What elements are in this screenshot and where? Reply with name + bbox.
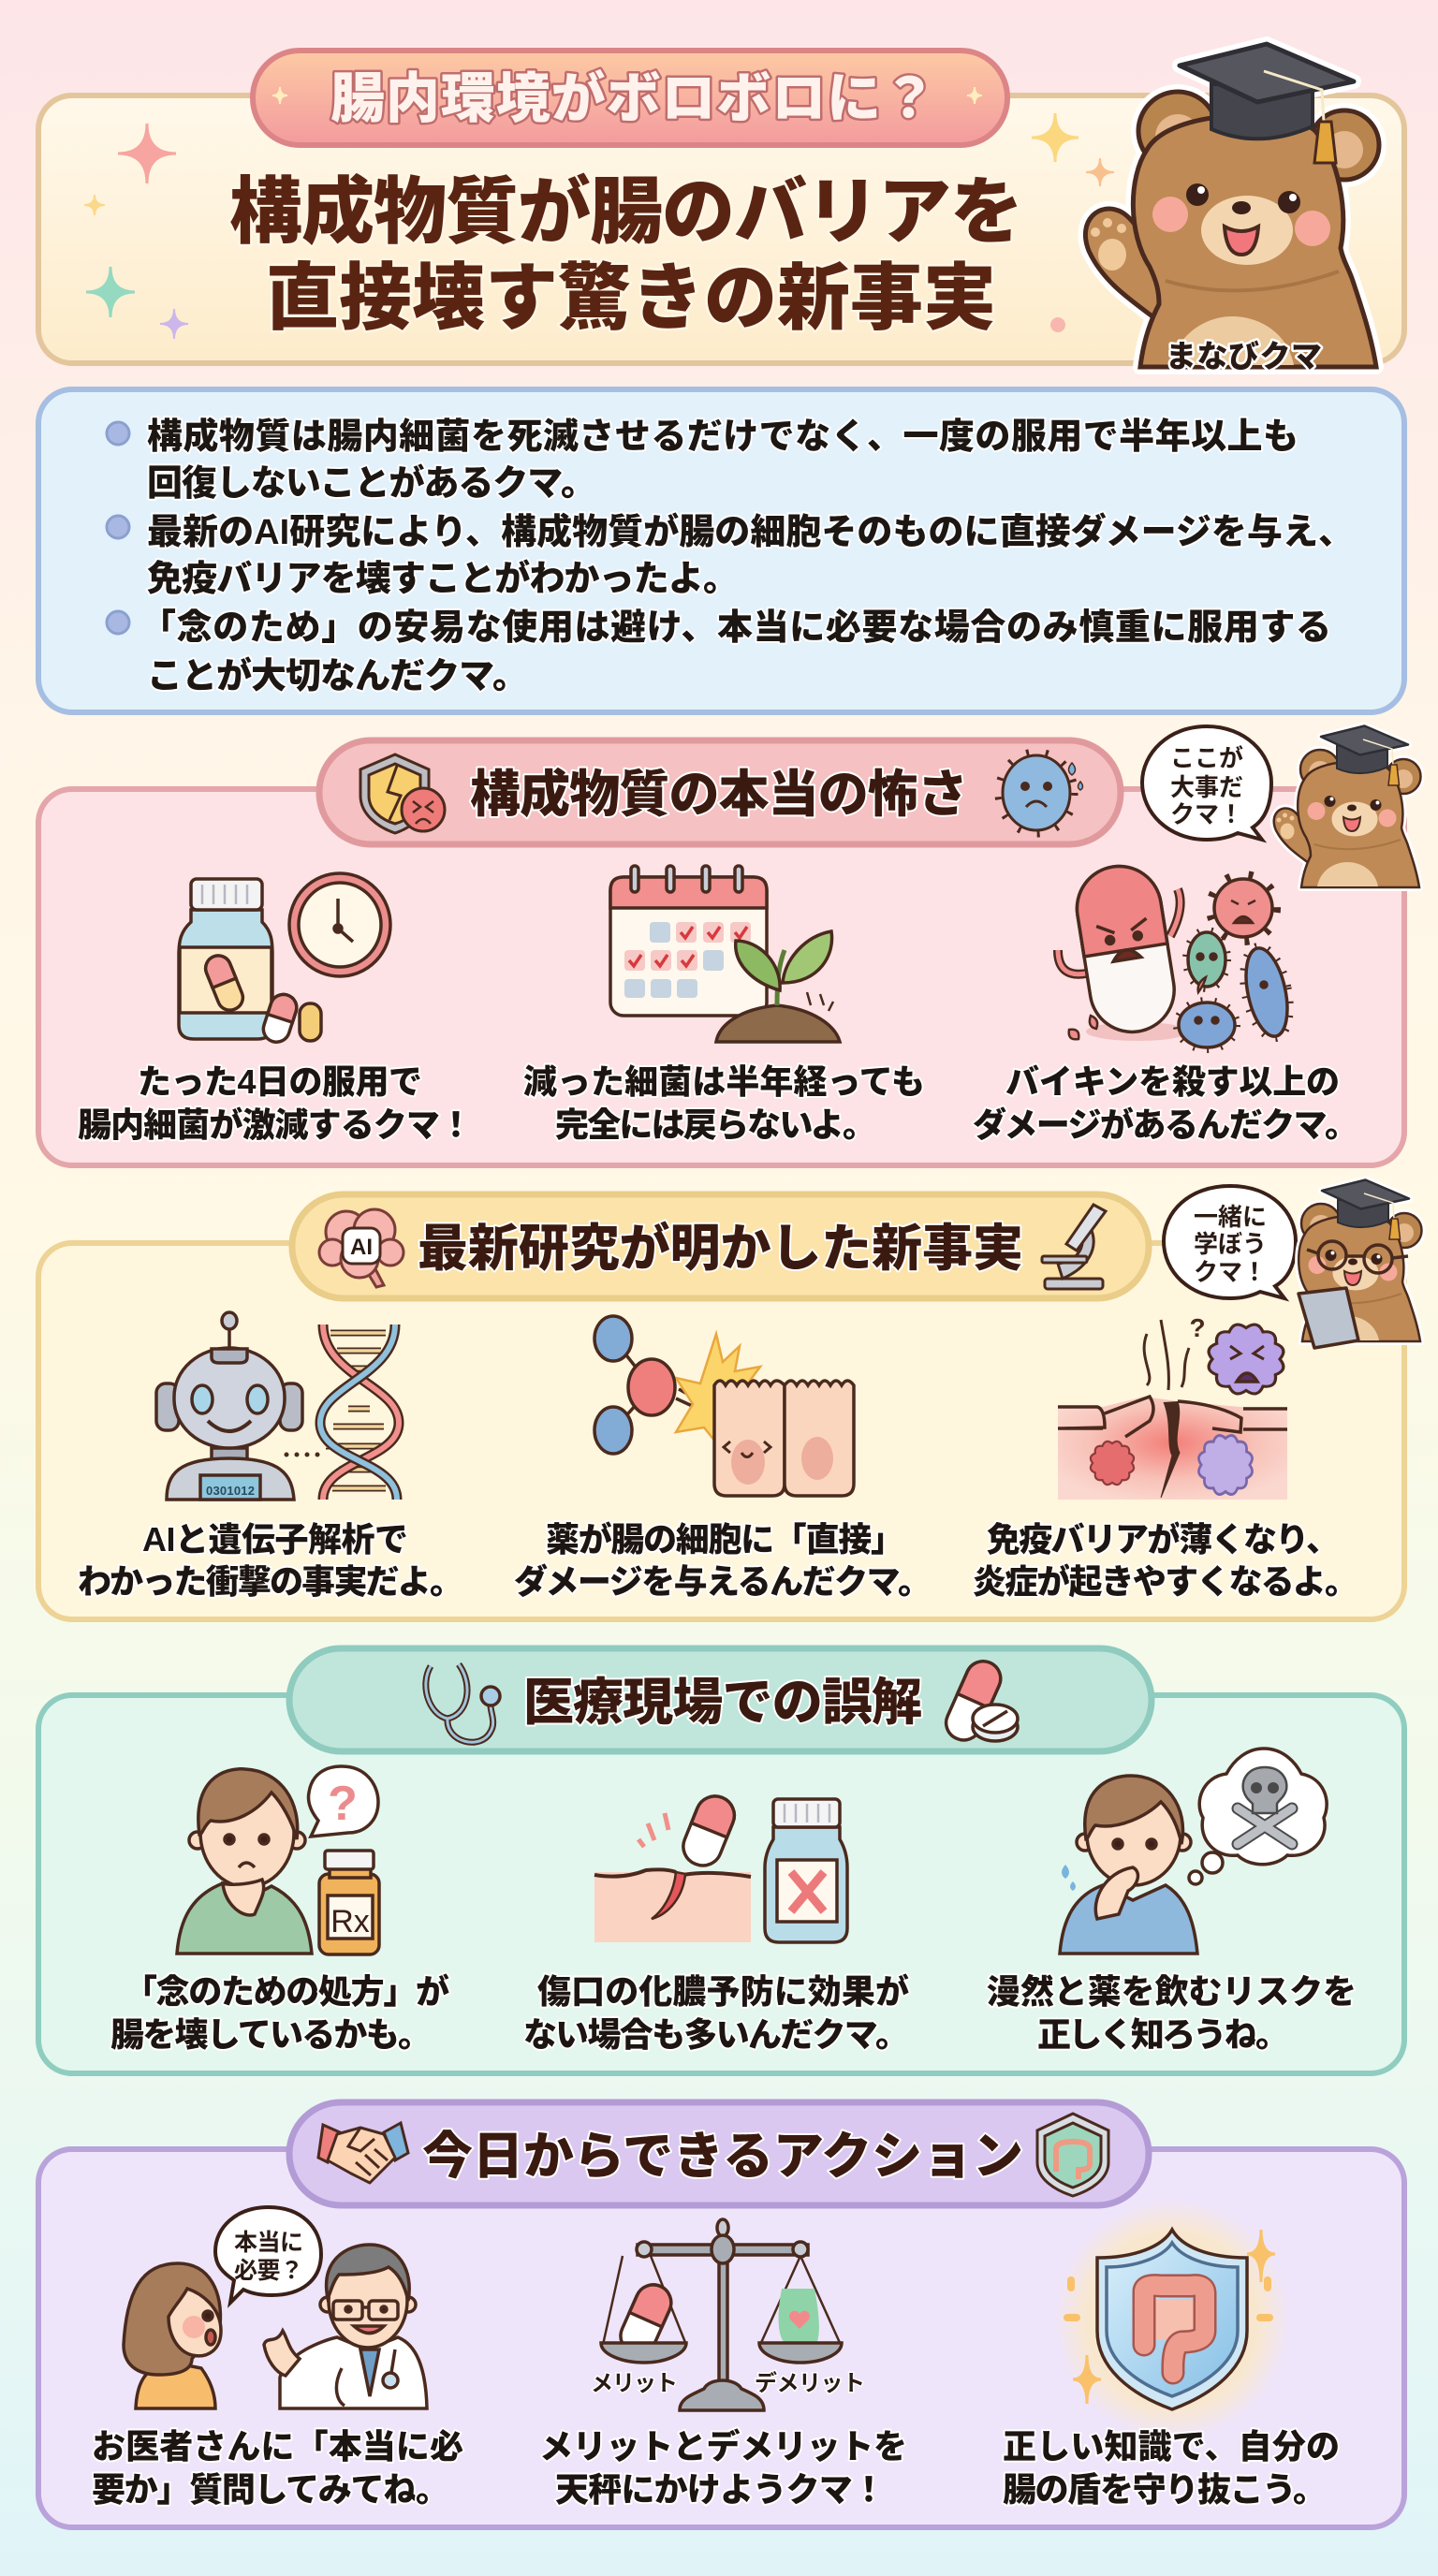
- summary text: 最新のAI研究により、構成物質が腸の細胞そのものに直接ダメージを与え、: [147, 512, 1354, 552]
- bear name label: まなびクマ: [1166, 339, 1322, 373]
- icon: confused person with prescription: ?: [328, 1777, 358, 1831]
- text: section 4 captions: 正しい知識で、自分の: [1003, 2427, 1340, 2466]
- panel: section 3: [38, 1648, 1404, 2073]
- text: section 2 captions: 薬が腸の細胞に「直接」: [546, 1520, 904, 1559]
- mascot bear with glasses and tablet: [1299, 1179, 1421, 1348]
- text: section 4 captions: お医者さんに「本当に必: [92, 2427, 463, 2466]
- text: section 1 captions: バイキンを殺す以上の: [1005, 1062, 1340, 1101]
- text: section 4 captions: [92, 2427, 1340, 2509]
- icon: confused person with prescription: Rx: [330, 1904, 370, 1939]
- speech bubble: クマ！: [1170, 800, 1243, 828]
- text: section 4 captions: 腸の盾を守り抜こう。: [1003, 2470, 1327, 2509]
- text: section 1 captions: 完全には戻らないよ。: [555, 1105, 876, 1144]
- icon: patient asks doctor: [124, 2207, 427, 2408]
- speech bubble: [1142, 726, 1271, 840]
- summary text: 免疫バリアを壊すことがわかったよ。: [147, 559, 739, 599]
- speech bubble: 本当に: [234, 2230, 303, 2256]
- title: [229, 170, 1023, 339]
- speech bubble: クマ！: [1194, 1258, 1267, 1286]
- mascot: manabi bear: [1085, 44, 1379, 373]
- heading pill: section 2: [292, 1194, 1149, 1298]
- text: section 2 captions: [78, 1520, 1358, 1601]
- icon: cracked shield: [360, 754, 445, 833]
- text: section 3 captions: [110, 1972, 1357, 2054]
- text: section 3 captions: 漫然と薬を飲むリスクを: [987, 1972, 1357, 2011]
- icon: microscope: [1042, 1205, 1106, 1289]
- mascot bear: [1274, 726, 1421, 887]
- summary text: [140, 417, 1354, 696]
- summary text: 回復しないことがあるクマ。: [147, 463, 596, 504]
- text: section 2 captions: ダメージを与えるんだクマ。: [514, 1562, 932, 1601]
- mascot with speech bubble: section 1: [1142, 726, 1421, 887]
- text: section 3 captions: 腸を壊しているかも。: [110, 2015, 432, 2054]
- icon: glowing gut shield: [1055, 2200, 1289, 2439]
- icon: sparkles: [84, 113, 1114, 339]
- speech bubble: [215, 2207, 321, 2303]
- text: section 1 captions: ダメージがあるんだクマ。: [973, 1105, 1358, 1144]
- icon: gut shield: [1037, 2114, 1108, 2196]
- panel: summary: [38, 389, 1404, 712]
- icon: molecule hits intestinal cells: [594, 1316, 854, 1496]
- icon: sad germ: [998, 752, 1082, 834]
- icon: worried person thinking of risk: [1060, 1749, 1327, 1954]
- scale labels: デメリット: [755, 2370, 865, 2396]
- heading pill: section 2: 最新研究が明かした新事実: [418, 1220, 1023, 1277]
- icon: wound with capsule and crossed bottle: [594, 1791, 847, 1942]
- icon: handshake: [318, 2123, 408, 2183]
- icon: robot and DNA: [156, 1312, 399, 1500]
- icon: confused person with prescription: [177, 1766, 379, 1954]
- text: section 1 captions: 減った細菌は半年経っても: [523, 1062, 925, 1101]
- text: section 2 captions: 免疫バリアが薄くなり、: [987, 1520, 1340, 1559]
- summary text: 構成物質は腸内細菌を死滅させるだけでなく、一度の服用で半年以上も: [147, 417, 1299, 457]
- text: section 4 captions: 天秤にかけようクマ！: [555, 2470, 886, 2509]
- heading pill: top: [253, 51, 1007, 145]
- speech bubble: ここが: [1170, 744, 1243, 772]
- icon: AI brain: AI: [350, 1235, 373, 1260]
- icon: damaged immune barrier: ?: [1189, 1313, 1206, 1342]
- panel: section 4: [38, 2102, 1404, 2527]
- mascot with speech bubble: section 2: [1164, 1179, 1421, 1348]
- speech bubble: 必要？: [234, 2258, 303, 2284]
- speech bubble: 学ぼう: [1194, 1230, 1267, 1258]
- speech bubble: [1164, 1186, 1296, 1298]
- icon: robot and DNA: 0301012: [206, 1484, 255, 1498]
- scale labels: [591, 2370, 865, 2396]
- text: section 4 captions: 要か」質問してみてね。: [92, 2470, 449, 2509]
- heading pill: section 3: 医療現場での誤解: [523, 1675, 922, 1731]
- text: section 1 captions: 腸内細菌が激減するクマ！: [78, 1105, 473, 1144]
- text: section 3 captions: 傷口の化膿予防に効果が: [537, 1972, 909, 2011]
- scale labels: メリット: [591, 2371, 678, 2396]
- text: section 3 captions: 「念のための処方」が: [124, 1972, 449, 2011]
- icon: angry capsule and germs: [1058, 860, 1299, 1050]
- text: section 1 captions: たった4日の服用で: [138, 1062, 422, 1101]
- icon: calendar and sprout: [610, 866, 840, 1042]
- panel: header: [38, 95, 1404, 363]
- text: section 1 captions: [78, 1062, 1358, 1144]
- title: 構成物質が腸のバリアを: [229, 170, 1023, 253]
- icon: stethoscope: [426, 1664, 500, 1742]
- panel: section 1: [38, 740, 1404, 1165]
- heading pill: section 1: [319, 740, 1121, 844]
- text: section 2 captions: わかった衝撃の事実だよ。: [78, 1562, 463, 1601]
- text: section 2 captions: AIと遺伝子解析で: [142, 1520, 408, 1559]
- bullet markers: [107, 422, 129, 634]
- icon: medicine bottle and clock: [179, 873, 390, 1046]
- heading pill: section 4: [289, 2102, 1149, 2205]
- text: section 4 captions: メリットとデメリットを: [539, 2427, 907, 2466]
- icon: capsule and tablet: [941, 1656, 1018, 1746]
- text: section 3 captions: 正しく知ろうね。: [1037, 2015, 1289, 2054]
- icon: damaged immune barrier: [1058, 1313, 1287, 1500]
- summary text: ことが大切なんだクマ。: [147, 656, 528, 696]
- heading pill: top: 腸内環境がボロボロに？: [330, 68, 936, 129]
- text: section 2 captions: 炎症が起きやすくなるよ。: [973, 1562, 1358, 1601]
- heading pill: section 3: [289, 1648, 1152, 1751]
- icon: balance scale: [591, 2219, 865, 2410]
- summary text: 「念のため」の安易な使用は避け、本当に必要な場合のみ慎重に服用する: [140, 608, 1331, 648]
- heading pill: section 1: 構成物質の本当の怖さ: [470, 766, 968, 823]
- speech bubble: 大事だ: [1170, 773, 1243, 801]
- title: 直接壊す驚きの新事実: [266, 256, 996, 339]
- speech bubble: 一緒に: [1194, 1203, 1267, 1231]
- panel: section 2: [38, 1194, 1404, 1619]
- heading pill: section 4: 今日からできるアクション: [422, 2129, 1023, 2185]
- icon: AI brain: [319, 1209, 404, 1287]
- text: section 3 captions: ない場合も多いんだクマ。: [523, 2015, 909, 2054]
